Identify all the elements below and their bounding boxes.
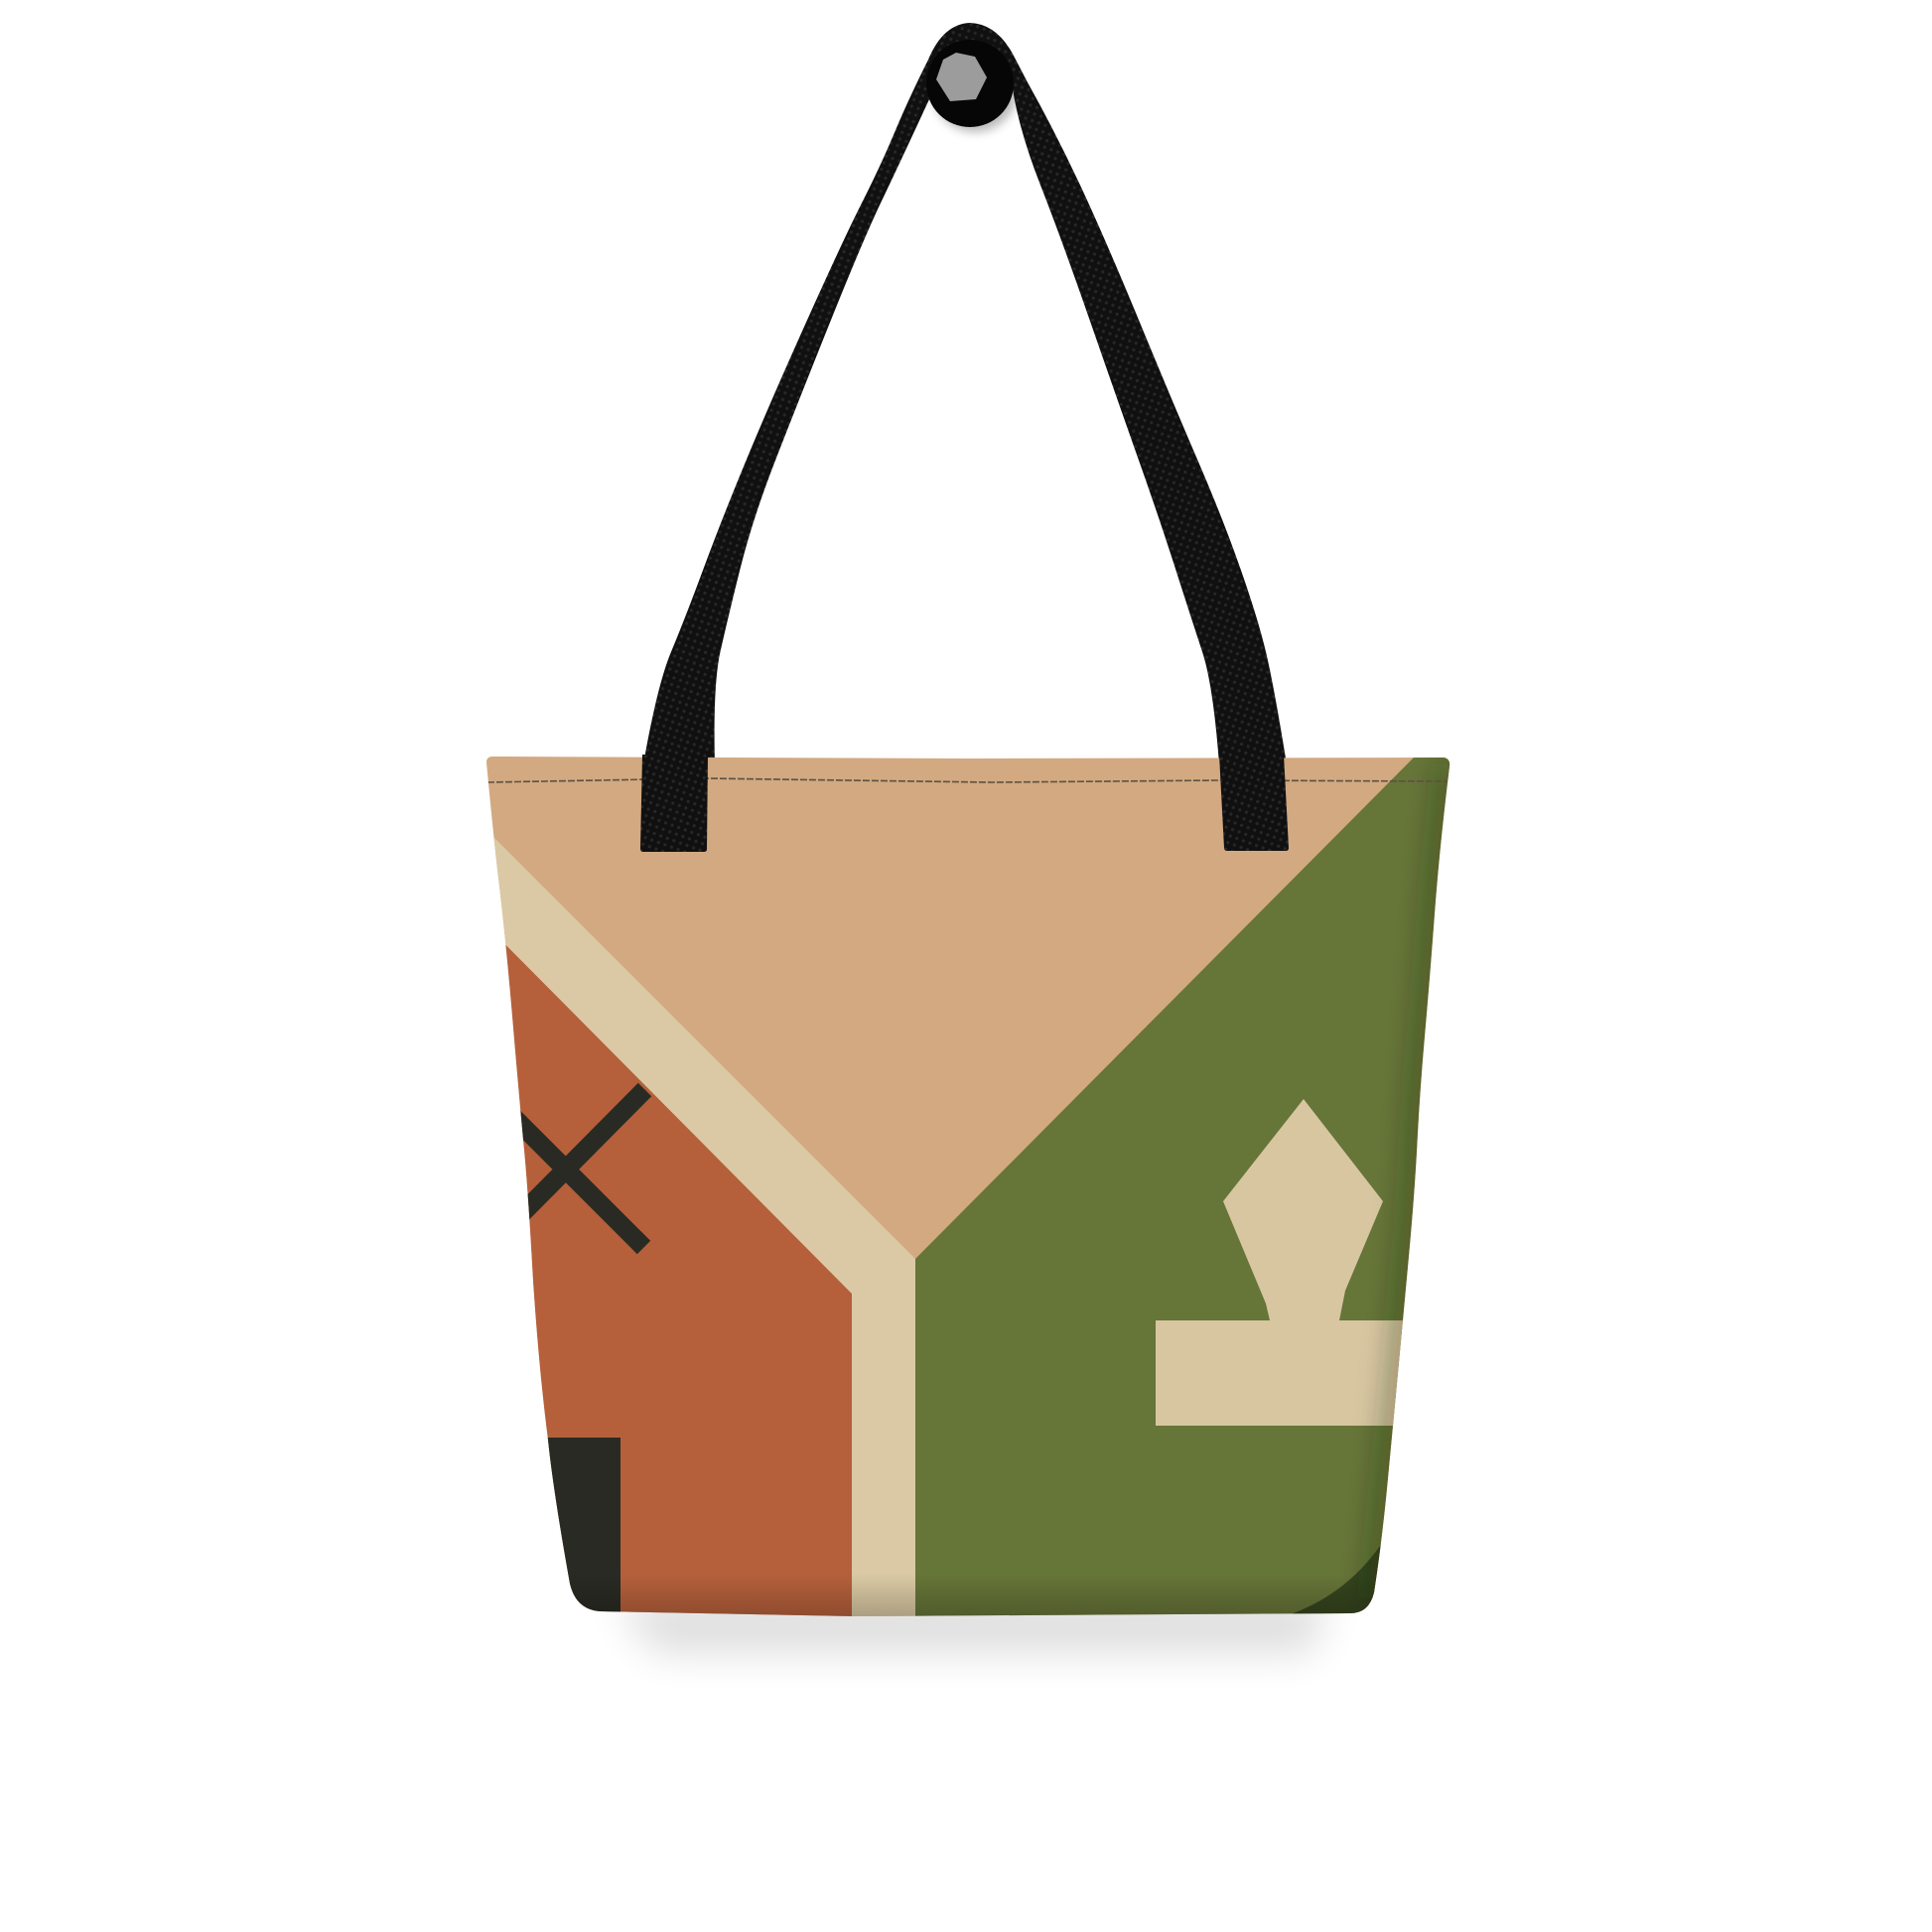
left strap front tab stitched to the bag xyxy=(640,755,708,852)
bag body xyxy=(467,745,1469,1638)
wall peg xyxy=(926,40,1014,127)
bottom edge shading xyxy=(580,1582,1370,1616)
cream arrow emblem xyxy=(1156,1099,1410,1426)
illustration: tote bag hanging from a peg xyxy=(486,23,1449,1666)
cream Y-shaped band xyxy=(477,820,915,1628)
right strap front tab stitched to the bag xyxy=(1219,755,1289,851)
top hem stitching xyxy=(487,778,1448,782)
windmill cross xyxy=(511,1090,645,1247)
green right panel xyxy=(915,757,1464,1628)
right edge shading xyxy=(1376,764,1451,1598)
peg shadow xyxy=(932,47,1018,132)
continuous strap running over the peg xyxy=(643,23,1287,764)
ground shadow under the bag xyxy=(616,1598,1330,1653)
tan top panel xyxy=(467,745,1469,1638)
terracotta house panel xyxy=(505,945,852,1616)
peg hexagon screw xyxy=(936,53,987,101)
dark green corner xyxy=(1293,1545,1381,1614)
black door xyxy=(548,1438,621,1612)
